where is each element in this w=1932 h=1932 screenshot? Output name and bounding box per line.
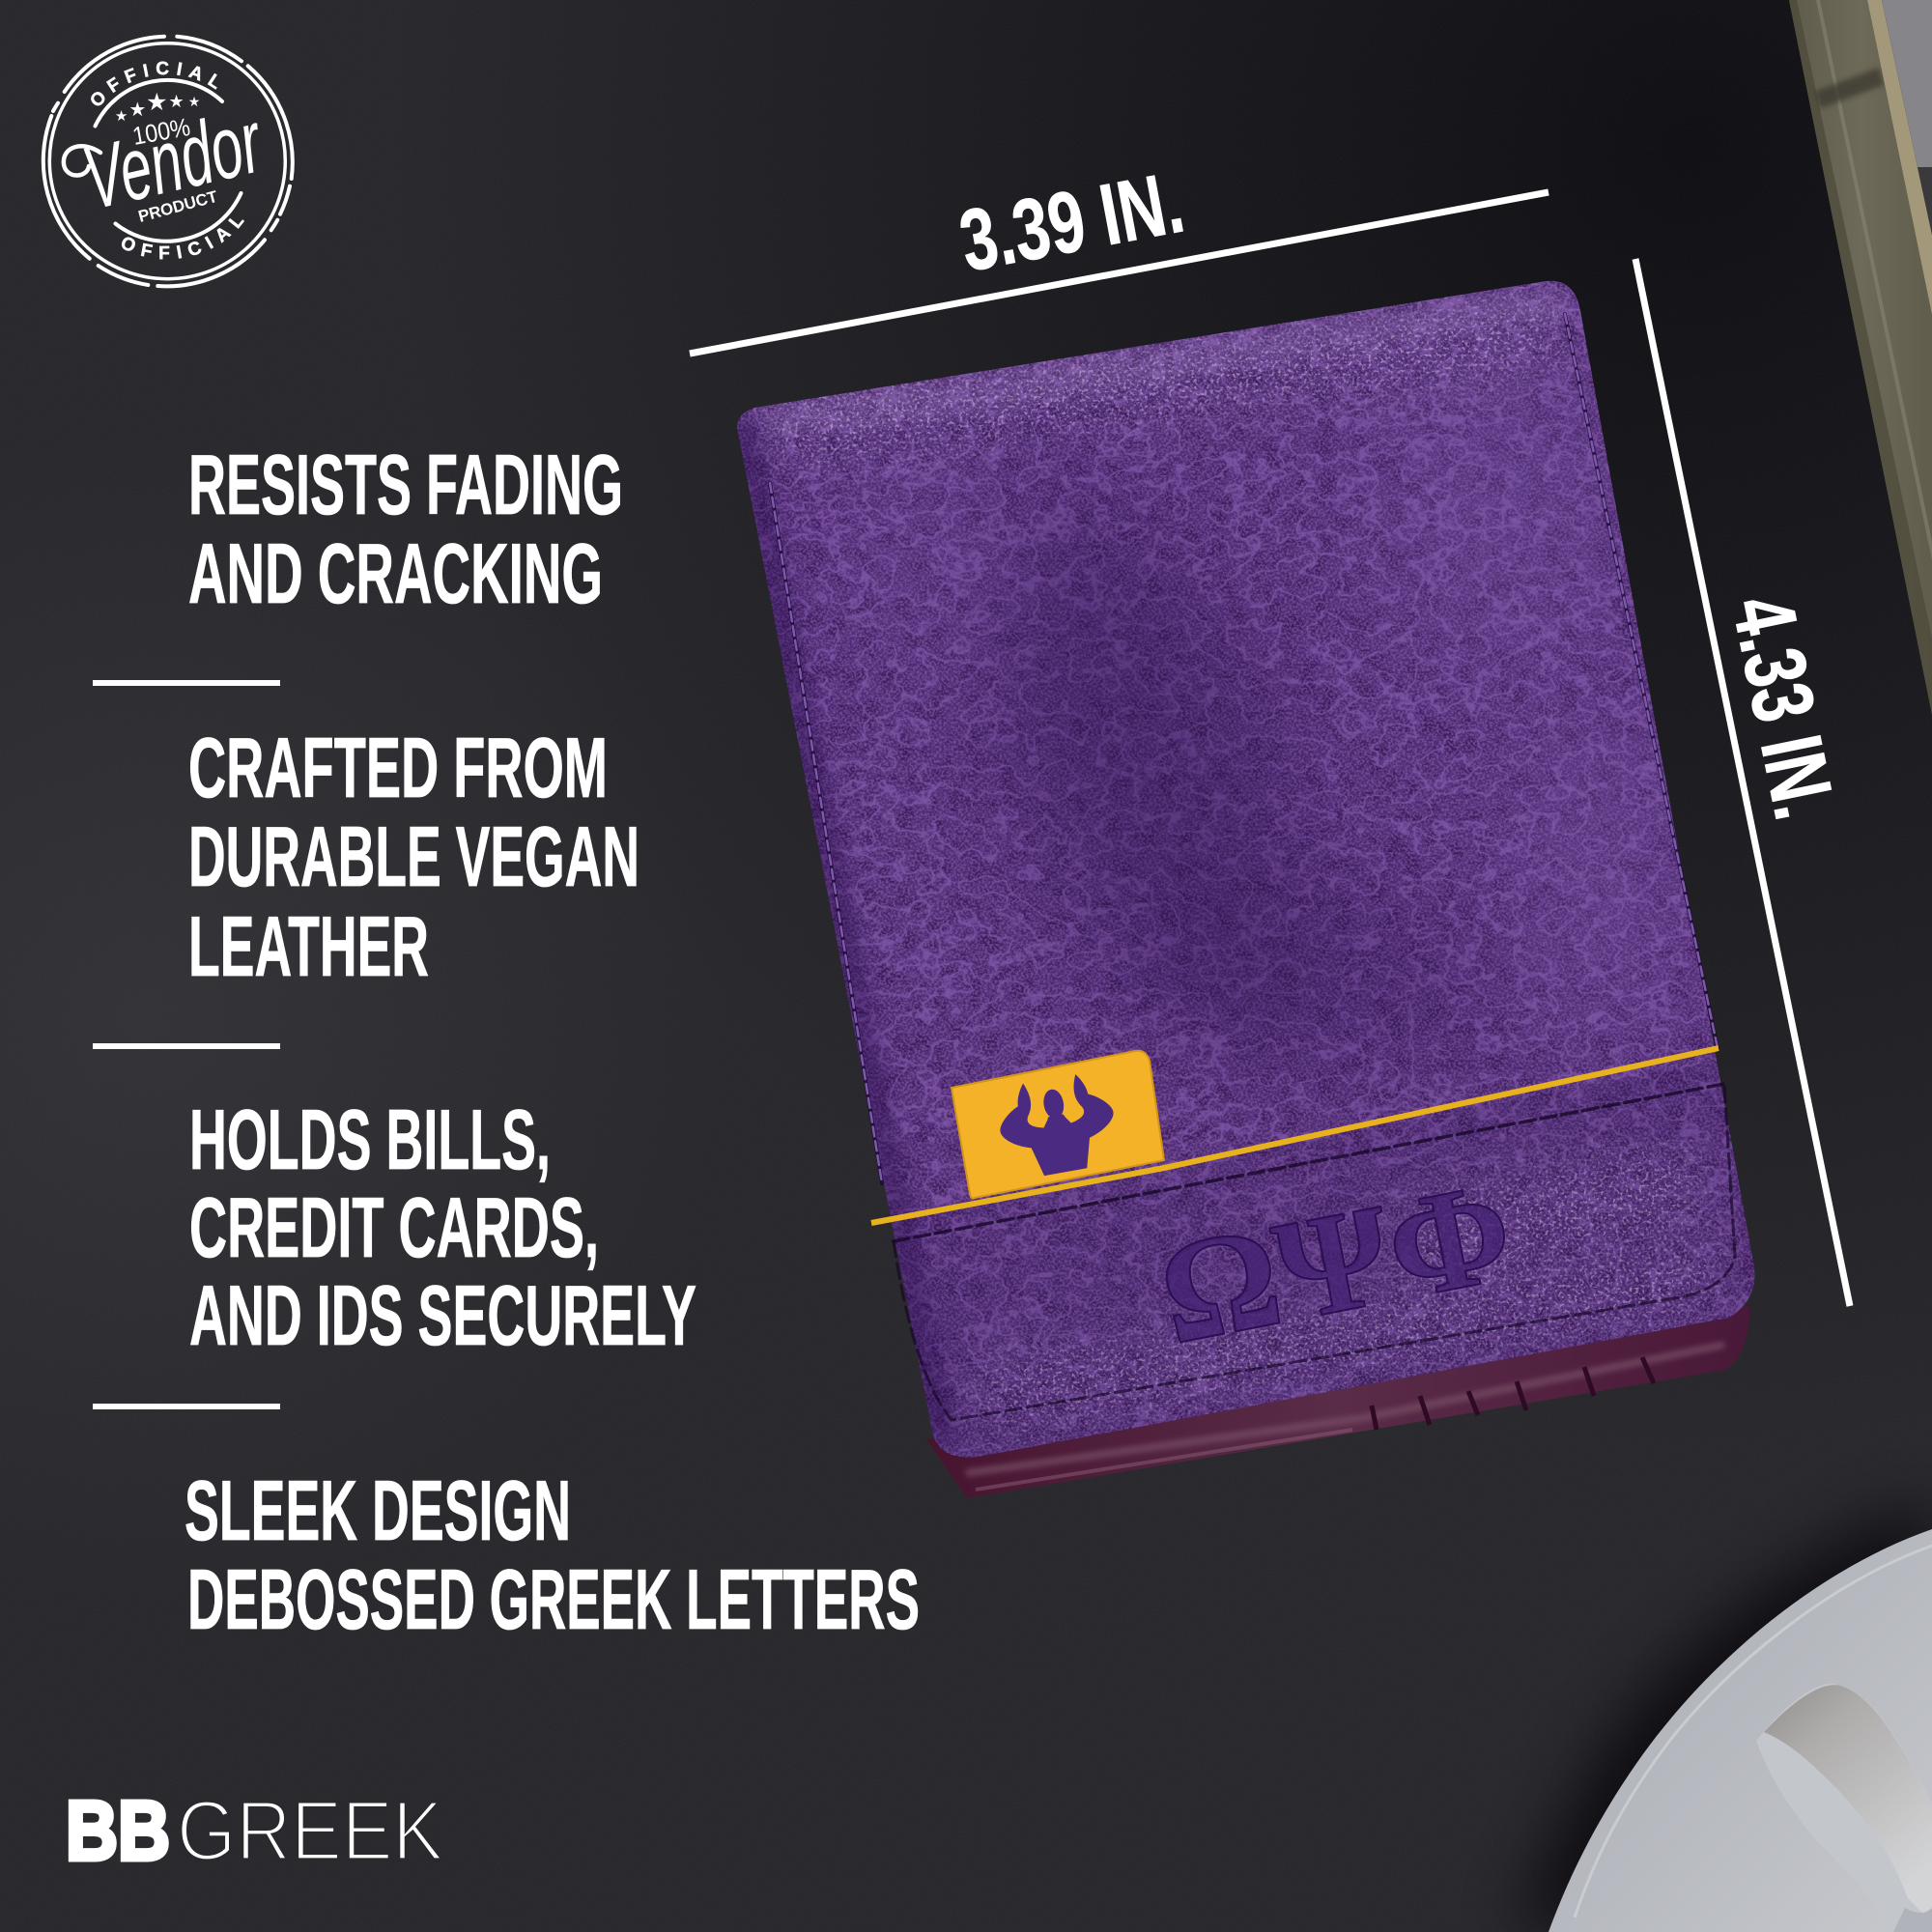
stamp bottom lettering: OFFICIAL (122, 218, 244, 259)
tonal patches (967, 484, 1333, 1059)
feature: holds bills: CREDIT CARDS, (189, 1179, 599, 1275)
stamp stars: ★ (128, 98, 146, 121)
feature: sleek design (185, 1463, 920, 1647)
vendor script: Vendor (75, 92, 272, 228)
stamp stars: ★ (188, 95, 200, 110)
vendor script (64, 92, 272, 228)
yellow tag with silhouette (952, 1051, 1164, 1198)
feature: vegan leather: LEATHER (188, 898, 429, 994)
stitching (770, 314, 1735, 1420)
feature: vegan leather: CRAFTED FROM (188, 720, 608, 815)
feature: holds bills: AND IDS SECURELY (189, 1267, 696, 1363)
100 percent: 100% (130, 112, 192, 151)
feature list (93, 437, 920, 1647)
wallet front flap (715, 270, 1768, 1478)
yellow piping (871, 1048, 1719, 1223)
wallet back layer (926, 1306, 1749, 1498)
BB Greek logo: GREEK (177, 1784, 443, 1878)
feature: sleek design: SLEEK DESIGN (185, 1463, 571, 1558)
stamp stars: ★ (146, 88, 168, 116)
debossed greek letters: ΩΨΦ (1151, 1152, 1527, 1378)
feature: holds bills (189, 1092, 696, 1363)
stamp top lettering: OFFICIAL (91, 62, 217, 106)
feature: resists fading: RESISTS FADING (188, 437, 623, 532)
flap left edge shade (744, 425, 942, 1439)
official vendor stamp (41, 35, 295, 288)
BB Greek logo (66, 1784, 443, 1878)
saucer and cup handle, bottom right (1517, 1502, 1932, 1932)
feature: holds bills: HOLDS BILLS, (189, 1092, 551, 1187)
width dimension (690, 155, 1548, 354)
feature: sleek design: DEBOSSED GREEK LETTERS (187, 1551, 920, 1647)
feature: vegan leather: DURABLE VEGAN (188, 809, 639, 904)
feature: vegan leather (188, 720, 639, 994)
stamp rings (43, 37, 293, 286)
feature: resists fading: AND CRACKING (188, 526, 603, 621)
pocket shading (915, 1061, 1754, 1457)
product: PRODUCT (136, 187, 220, 226)
book spine, top right corner (1789, 0, 1932, 715)
purple leather wallet (715, 270, 1768, 1498)
silhouette icon (993, 1068, 1122, 1182)
BB Greek logo: BB (66, 1784, 170, 1878)
leather gloss along top and lower pocket (763, 299, 1565, 425)
height dimension (1635, 259, 1853, 1306)
feature: resists fading (188, 437, 623, 621)
stamp stars (115, 88, 200, 125)
width dimension: 3.39 IN. (952, 155, 1191, 291)
debossed greek letters: ΩΨΦ (1148, 1151, 1524, 1375)
stamp stars: ★ (169, 92, 185, 112)
height dimension: 4.33 IN. (1713, 588, 1853, 827)
stamp stars: ★ (115, 107, 128, 125)
